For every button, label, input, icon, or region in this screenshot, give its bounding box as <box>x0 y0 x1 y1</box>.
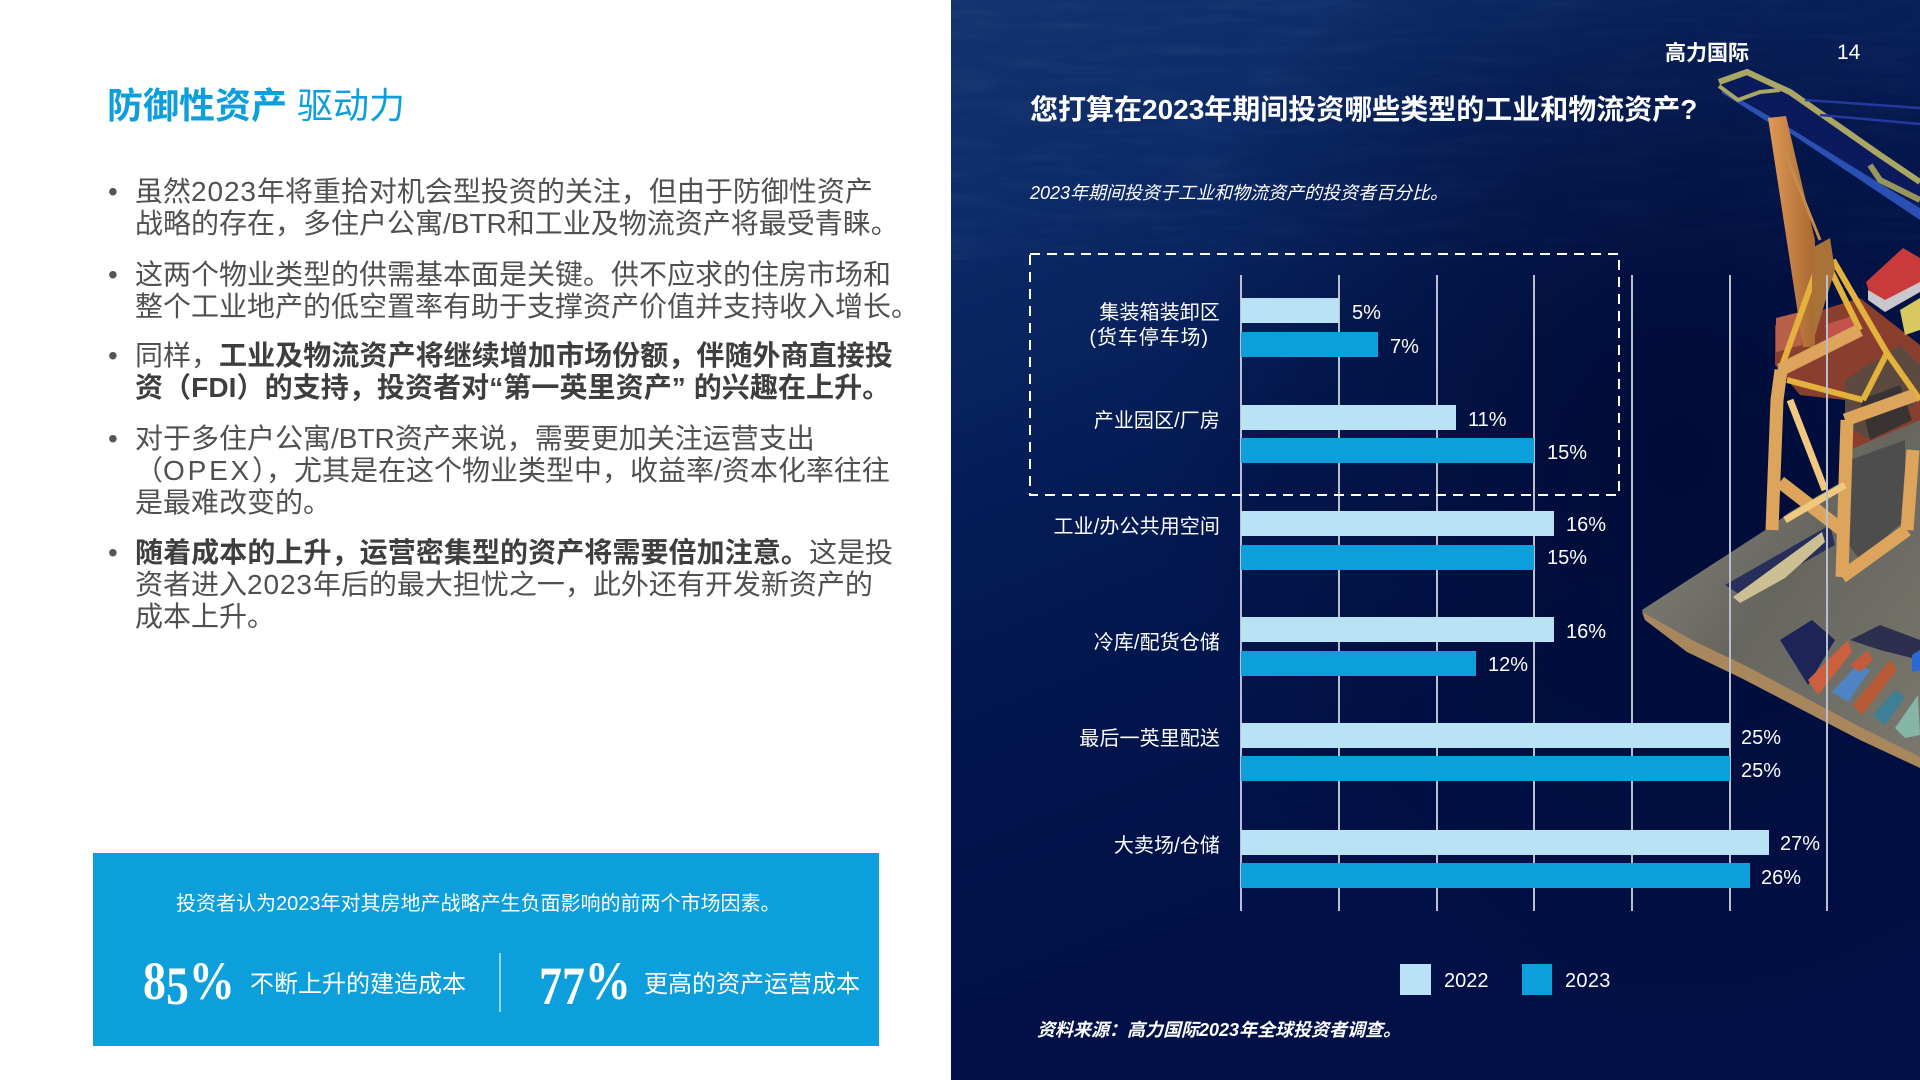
divider <box>499 953 501 1012</box>
left panel: text content: • <box>108 176 118 207</box>
bullet 5: 随着成本的上升，运营密集型的资产将需要倍加注意。这是投 <box>135 537 893 568</box>
left panel: text content <box>0 0 951 1080</box>
row: last mile: 25% <box>1741 727 1781 749</box>
row: container yard: 5% <box>1352 302 1381 324</box>
bullet 3: 同样，工业及物流资产将继续增加市场份额，伴随外商直接投 <box>135 340 893 371</box>
dock surface <box>1642 400 1920 765</box>
chart title: 您打算在2023年期间投资哪些类型的工业和物流资产? <box>1030 94 1697 125</box>
bullet 2: 整个工业地产的低空置率有助于支撑资产价值并支持收入增长。 <box>135 291 919 322</box>
legend <box>1400 964 1611 995</box>
bullet 4: 对于多住户公寓/BTR资产来说，需要更加关注运营支出 <box>135 423 815 454</box>
legend swatch 2023 <box>1522 964 1552 995</box>
bullet 3 <box>108 340 893 403</box>
row: last mile: 最后一英里配送 <box>1079 728 1220 750</box>
row: industrial coworking: 15% <box>1547 547 1587 569</box>
heading: 防御性资产 驱动力 <box>107 85 405 126</box>
row: last mile <box>1079 723 1781 782</box>
chart subtitle: 2023年期间投资于工业和物流资产的投资者百分比。 <box>1030 183 1448 203</box>
page number: 14 <box>1837 41 1860 64</box>
bullet 3: 资（FDI）的支持，投资者对“第一英里资产” 的兴趣在上升。 <box>135 372 890 403</box>
bullet 2 <box>108 259 919 322</box>
row: last mile: 25% <box>1741 760 1781 782</box>
row: container yard <box>1089 298 1419 358</box>
bullet 1: 虽然2023年将重拾对机会型投资的关注，但由于防御性资产 <box>135 176 873 207</box>
row: industrial coworking: 16% <box>1566 514 1606 536</box>
row: industrial coworking <box>1054 511 1606 570</box>
stat: 77%: 77% <box>539 951 631 1016</box>
stat label: construction cost: 不断上升的建造成本 <box>250 971 466 998</box>
upper yellow frame <box>1778 260 1920 400</box>
stat: 85%: 85% <box>143 951 235 1016</box>
row: cold storage <box>1094 617 1606 676</box>
legend label 2023: 2023 <box>1565 970 1611 992</box>
bullet 5: 资者进入2023年后的最大担忧之一，此外还有开发新资产的 <box>135 569 873 600</box>
legend swatch 2022 <box>1400 964 1431 995</box>
row: big box warehouse: 大卖场/仓储 <box>1114 835 1220 857</box>
bullet 5 <box>108 537 893 632</box>
row: container yard: (货车停车场) <box>1089 327 1209 349</box>
left panel: text content: • <box>108 537 118 568</box>
row: cold storage: 冷库/配货仓储 <box>1094 632 1220 654</box>
bullet 4 <box>108 423 890 518</box>
bullet 4: （OPEX），尤其是在这个物业类型中，收益率/资本化率往往 <box>135 455 890 486</box>
crane deck and ship <box>1775 298 1920 450</box>
bullet 5: 成本上升。 <box>135 601 275 632</box>
row: industrial park: 15% <box>1547 442 1587 464</box>
mast <box>1768 116 1815 347</box>
source note: 资料来源：高力国际2023年全球投资者调查。 <box>1037 1020 1401 1040</box>
row: big box warehouse: 27% <box>1780 833 1820 855</box>
row: container yard: 7% <box>1390 336 1419 358</box>
row: cold storage: 12% <box>1488 654 1528 676</box>
row: industrial park: 产业园区/厂房 <box>1094 410 1220 432</box>
legend label 2022: 2022 <box>1444 970 1488 992</box>
row: industrial park: 11% <box>1468 409 1507 431</box>
callout panel: top two market factors <box>93 853 879 1046</box>
left panel: text content: • <box>108 340 118 371</box>
row: big box warehouse <box>1114 830 1820 889</box>
bullet 4: 是最难改变的。 <box>135 487 331 518</box>
bullet 1: 战略的存在，多住户公寓/BTR和工业及物流资产将最受青睐。 <box>135 208 899 239</box>
port crane and dock illustration <box>1642 72 1920 768</box>
left panel: text content: • <box>108 423 118 454</box>
page header: brand: 高力国际 <box>1665 42 1749 65</box>
boom truss <box>1722 89 1920 220</box>
row: container yard: 集装箱装卸区 <box>1099 302 1220 324</box>
stat label: operating cost: 更高的资产运营成本 <box>644 971 860 998</box>
row: cold storage: 16% <box>1566 621 1606 643</box>
dock shadows <box>1725 525 1835 598</box>
right panel: sea and port photo backdrop <box>951 0 1920 1080</box>
row: industrial coworking: 工业/办公共用空间 <box>1054 516 1220 538</box>
dashed highlight box <box>1029 253 1620 496</box>
row: industrial park <box>1094 405 1587 464</box>
dock cargo <box>1808 640 1852 695</box>
bullet 2: 这两个物业类型的供需基本面是关键。供不应求的住房市场和 <box>135 259 891 290</box>
left panel: text content: • <box>108 259 118 290</box>
row: big box warehouse: 26% <box>1761 867 1801 889</box>
lower portal legs <box>1772 330 1915 577</box>
callout heading: 投资者认为2023年对其房地产战略产生负面影响的前两个市场因素。 <box>176 893 780 915</box>
bullet 1 <box>108 176 899 239</box>
